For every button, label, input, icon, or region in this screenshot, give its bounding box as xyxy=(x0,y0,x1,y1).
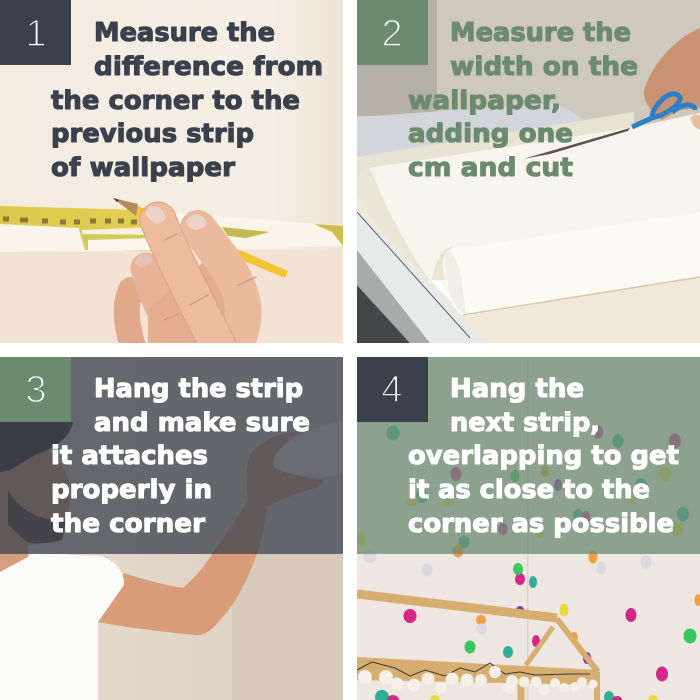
step 3 text: it attaches xyxy=(51,441,208,471)
step 3 text: the corner xyxy=(51,509,205,539)
grey overlay xyxy=(0,357,343,554)
ruler edge xyxy=(357,207,487,343)
fingernails xyxy=(145,206,166,223)
pinky finger xyxy=(127,290,134,350)
step 1 text: Measure the xyxy=(94,18,275,48)
table top xyxy=(357,103,585,158)
back wall xyxy=(357,0,700,130)
step 1 text: the corner to the xyxy=(51,86,300,116)
palm xyxy=(148,263,226,343)
index finger xyxy=(158,220,220,350)
scissor blade xyxy=(523,128,630,159)
wallpaper roll xyxy=(443,248,700,316)
wallpaper sheet xyxy=(370,113,700,292)
number badge 2 xyxy=(357,0,428,65)
ring finger xyxy=(130,252,170,316)
beige back sheet xyxy=(357,112,634,210)
lower wall shading xyxy=(0,250,308,343)
wooden house bed frame xyxy=(357,594,598,700)
step 3 text xyxy=(51,374,310,539)
scissor handles xyxy=(632,94,695,127)
hand xyxy=(127,206,256,350)
panel: step 2 measure the width and cut xyxy=(357,0,700,343)
step 4 text: next strip, xyxy=(450,408,600,438)
string light wire xyxy=(357,662,590,676)
white t-shirt xyxy=(0,553,124,700)
step 4 text xyxy=(408,374,679,539)
step 1 text: difference from xyxy=(94,52,323,82)
step 2 text: Measure the xyxy=(450,18,631,48)
beard xyxy=(8,490,66,543)
step 4 text: it as close to the xyxy=(408,475,650,505)
number badge 1: 1 xyxy=(25,13,47,55)
wallpaper strip xyxy=(232,554,268,700)
step 3 text: and make sure xyxy=(94,408,310,438)
upper wall strip xyxy=(258,357,343,554)
step 2 text: width on the xyxy=(450,52,638,82)
string light globes xyxy=(358,666,598,696)
number badge 3: 3 xyxy=(25,369,47,411)
step 4 text: overlapping to get xyxy=(408,441,679,471)
wall xyxy=(357,357,700,700)
wall background xyxy=(0,0,343,250)
step 1 text xyxy=(51,18,323,183)
number badge 1 xyxy=(0,0,71,65)
arm and hand xyxy=(644,28,700,130)
corner line xyxy=(527,357,528,700)
green overlay xyxy=(357,357,700,554)
step 3 text: properly in xyxy=(51,475,212,505)
pencil xyxy=(113,198,288,278)
panel: step 3 hang the strip xyxy=(0,357,343,700)
step 4 text: corner as possible xyxy=(408,509,674,539)
knuckle creases xyxy=(164,234,256,320)
panel: step 4 hang the next strip xyxy=(356,357,700,700)
man neck xyxy=(0,530,28,572)
step 2 text xyxy=(408,18,638,183)
step 1 text: previous strip xyxy=(51,119,254,149)
wallpaper curl underside xyxy=(368,206,427,276)
step 2 text: adding one xyxy=(408,119,573,149)
number badge 3 xyxy=(0,357,71,422)
middle finger xyxy=(198,228,243,350)
number badge 4 xyxy=(357,357,428,422)
panel: step 1 measure the difference xyxy=(0,0,343,350)
number badge 4: 4 xyxy=(381,369,403,411)
step 1 text: of wallpaper xyxy=(51,153,235,183)
man face xyxy=(0,440,70,545)
step 2 text: wallpaper, xyxy=(408,86,561,116)
step 3 text: Hang the strip xyxy=(94,374,303,404)
table surface xyxy=(360,209,700,343)
wallpaper roll top xyxy=(272,420,343,479)
step 2 text: cm and cut xyxy=(408,153,573,183)
measuring tape xyxy=(0,206,343,252)
wall xyxy=(0,357,258,700)
left darker wall xyxy=(357,0,437,116)
confetti dots xyxy=(356,426,700,700)
step 4 text: Hang the xyxy=(450,374,584,404)
hair xyxy=(0,422,73,472)
inner curl of roll xyxy=(432,247,452,280)
man arm and hand xyxy=(97,432,323,635)
number badge 2: 2 xyxy=(381,13,403,55)
